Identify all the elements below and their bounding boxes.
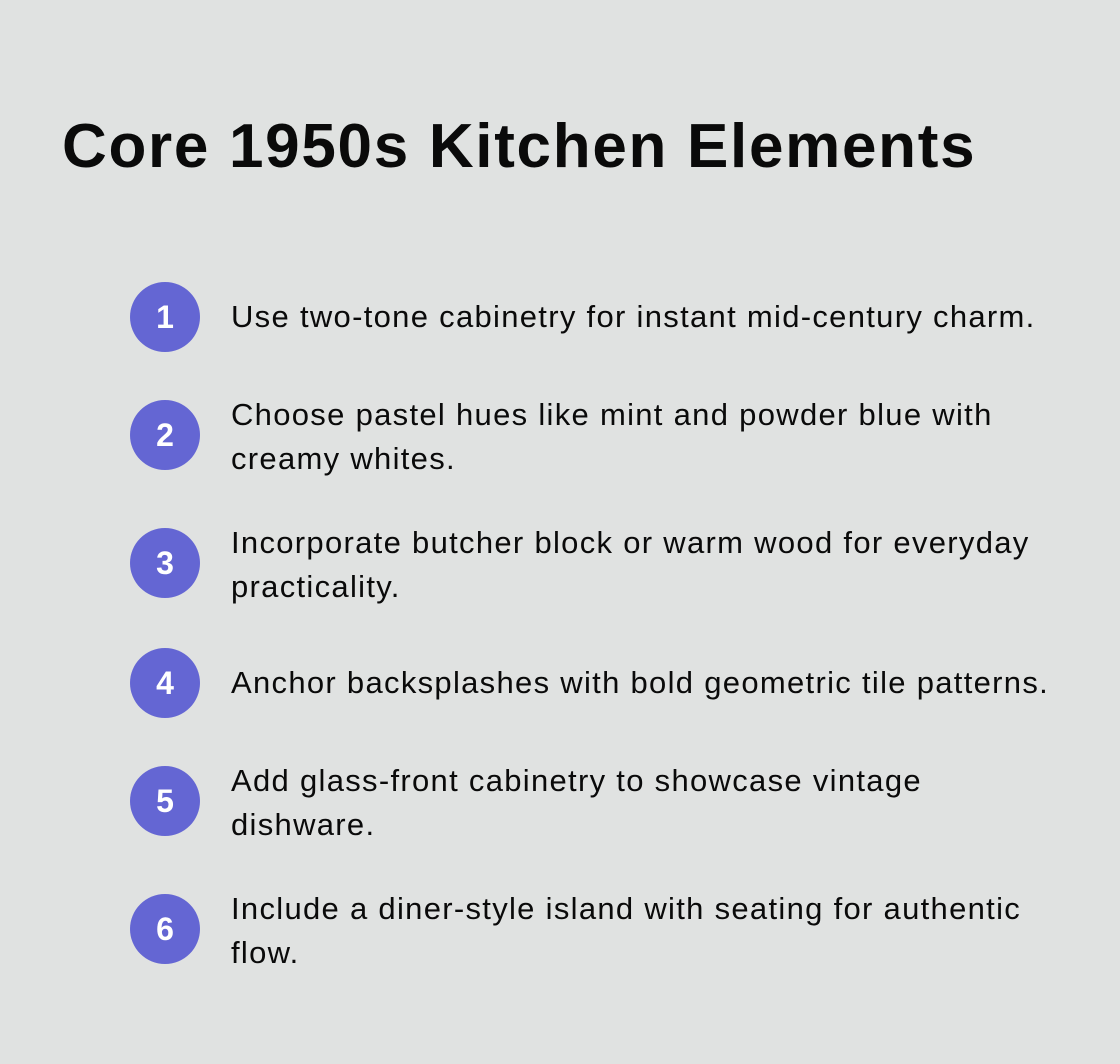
badge 4	[130, 648, 200, 718]
badge 6	[130, 894, 200, 964]
badge 5	[130, 766, 200, 836]
item 2	[130, 397, 993, 476]
text 4: Anchor backsplashes with bold geometric tile patterns.	[231, 665, 1049, 700]
item 6	[130, 891, 1021, 970]
item 4	[130, 648, 1049, 718]
text 6	[231, 891, 1021, 970]
text 6: Include a diner-style island with seating for authentic	[231, 891, 1021, 926]
badge 6: 6	[156, 911, 174, 947]
text 5: Add glass-front cabinetry to showcase vintage	[231, 763, 922, 798]
text 3	[231, 525, 1030, 604]
item 3	[130, 525, 1030, 604]
text 5	[231, 763, 922, 842]
badge 1: 1	[156, 299, 174, 335]
badge 5: 5	[156, 783, 174, 819]
text 5: dishware.	[231, 807, 375, 842]
text 3: Incorporate butcher block or warm wood for everyday	[231, 525, 1030, 560]
item 1	[130, 282, 1036, 352]
badge 4: 4	[156, 665, 174, 701]
title: Core 1950s Kitchen Elements	[62, 112, 976, 181]
badge 2	[130, 400, 200, 470]
badge 1	[130, 282, 200, 352]
text 6: flow.	[231, 935, 300, 970]
text 1: Use two-tone cabinetry for instant mid-century charm.	[231, 299, 1036, 334]
text 3: practicality.	[231, 569, 401, 604]
text 2: Choose pastel hues like mint and powder blue with	[231, 397, 993, 432]
badge 3	[130, 528, 200, 598]
text 2: creamy whites.	[231, 441, 456, 476]
text 2	[231, 397, 993, 476]
item 5	[130, 763, 922, 842]
badge 3: 3	[156, 545, 174, 581]
badge 2: 2	[156, 417, 174, 453]
